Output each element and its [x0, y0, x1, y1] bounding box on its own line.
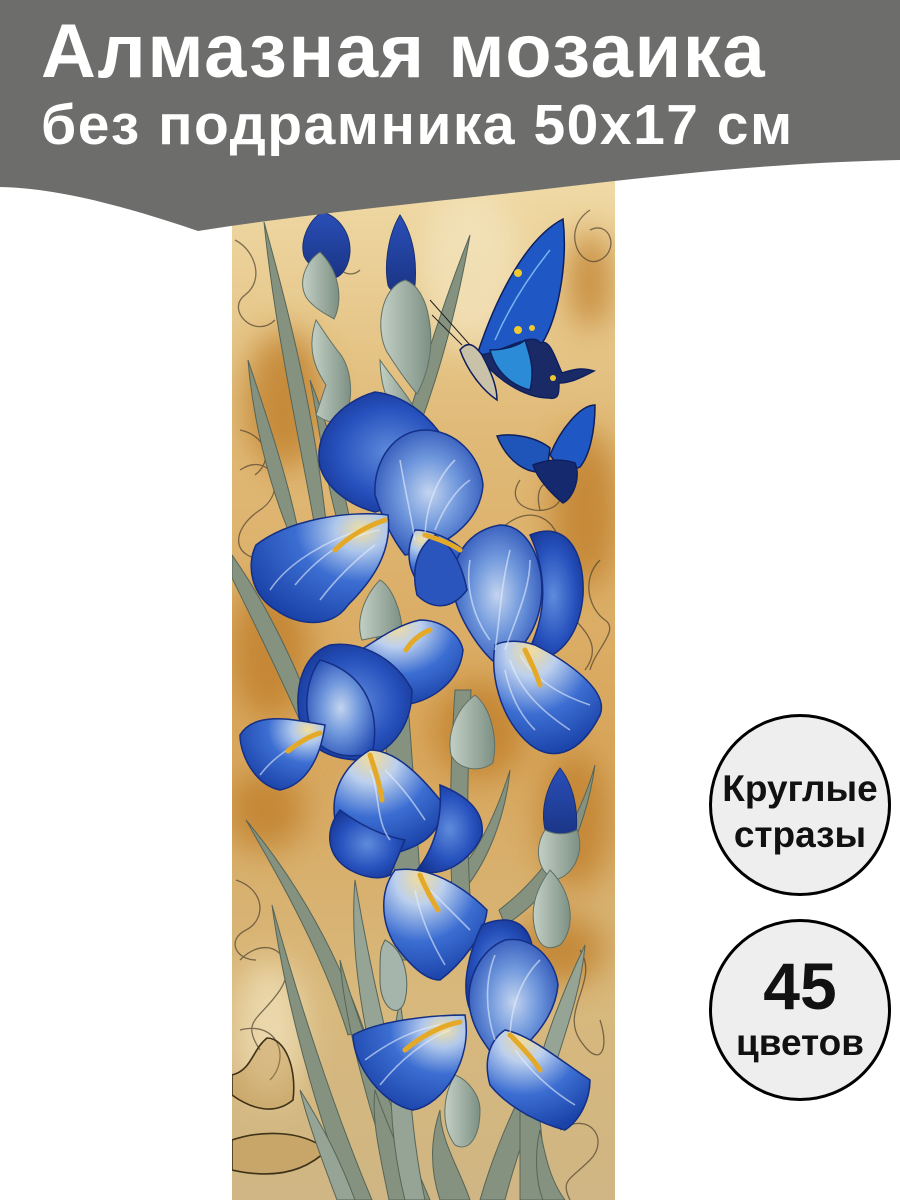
badge: 45 colours: цветов — [736, 1022, 864, 1063]
header banner — [0, 0, 900, 231]
badge: round rhinestones: стразы — [734, 814, 866, 855]
iris 1 — [240, 392, 601, 1130]
badge: round rhinestones: Круглые — [722, 768, 878, 809]
small sketched butterfly — [232, 1038, 327, 1174]
butterfly 1 — [430, 219, 595, 503]
yellow beards — [288, 520, 540, 1070]
buds — [303, 212, 577, 839]
badge: 45 colours: 45 — [763, 949, 837, 1023]
badge: round rhinestones — [709, 714, 891, 896]
background swirls — [235, 210, 611, 1200]
bud sepals — [303, 252, 580, 1147]
subtitle: без подрамника 50х17 см — [41, 93, 794, 157]
title: Алмазная мозаика — [41, 9, 766, 94]
butterfly dots — [514, 269, 556, 381]
badge: 45 colours — [709, 919, 891, 1101]
painting: irises and butterflies — [232, 181, 615, 1200]
petal veins — [260, 460, 590, 1105]
leaves — [232, 222, 595, 1200]
